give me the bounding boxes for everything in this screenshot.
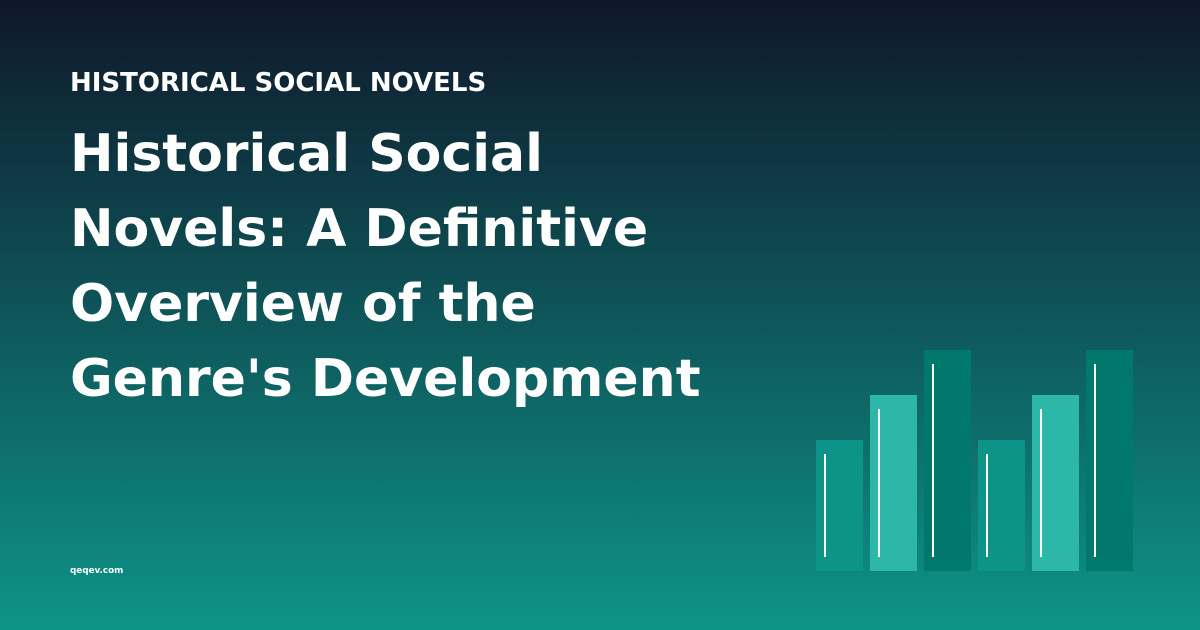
bar 4 <box>978 440 1025 571</box>
bar 5 <box>1032 395 1079 571</box>
kicker heading: HISTORICAL SOCIAL NOVELS <box>70 68 486 98</box>
bar 1 <box>816 440 863 571</box>
bar 3 <box>924 350 971 571</box>
bar chart illustration <box>816 350 1133 571</box>
title: Overview of the <box>70 274 536 334</box>
site label: qeqev.com <box>70 566 123 576</box>
title: Novels: A Definitive <box>70 199 648 259</box>
title: Genre's Development <box>70 349 701 409</box>
bar 2 <box>870 395 917 571</box>
title <box>70 124 701 409</box>
bar 6 <box>1086 350 1133 571</box>
title: Historical Social <box>70 124 543 184</box>
